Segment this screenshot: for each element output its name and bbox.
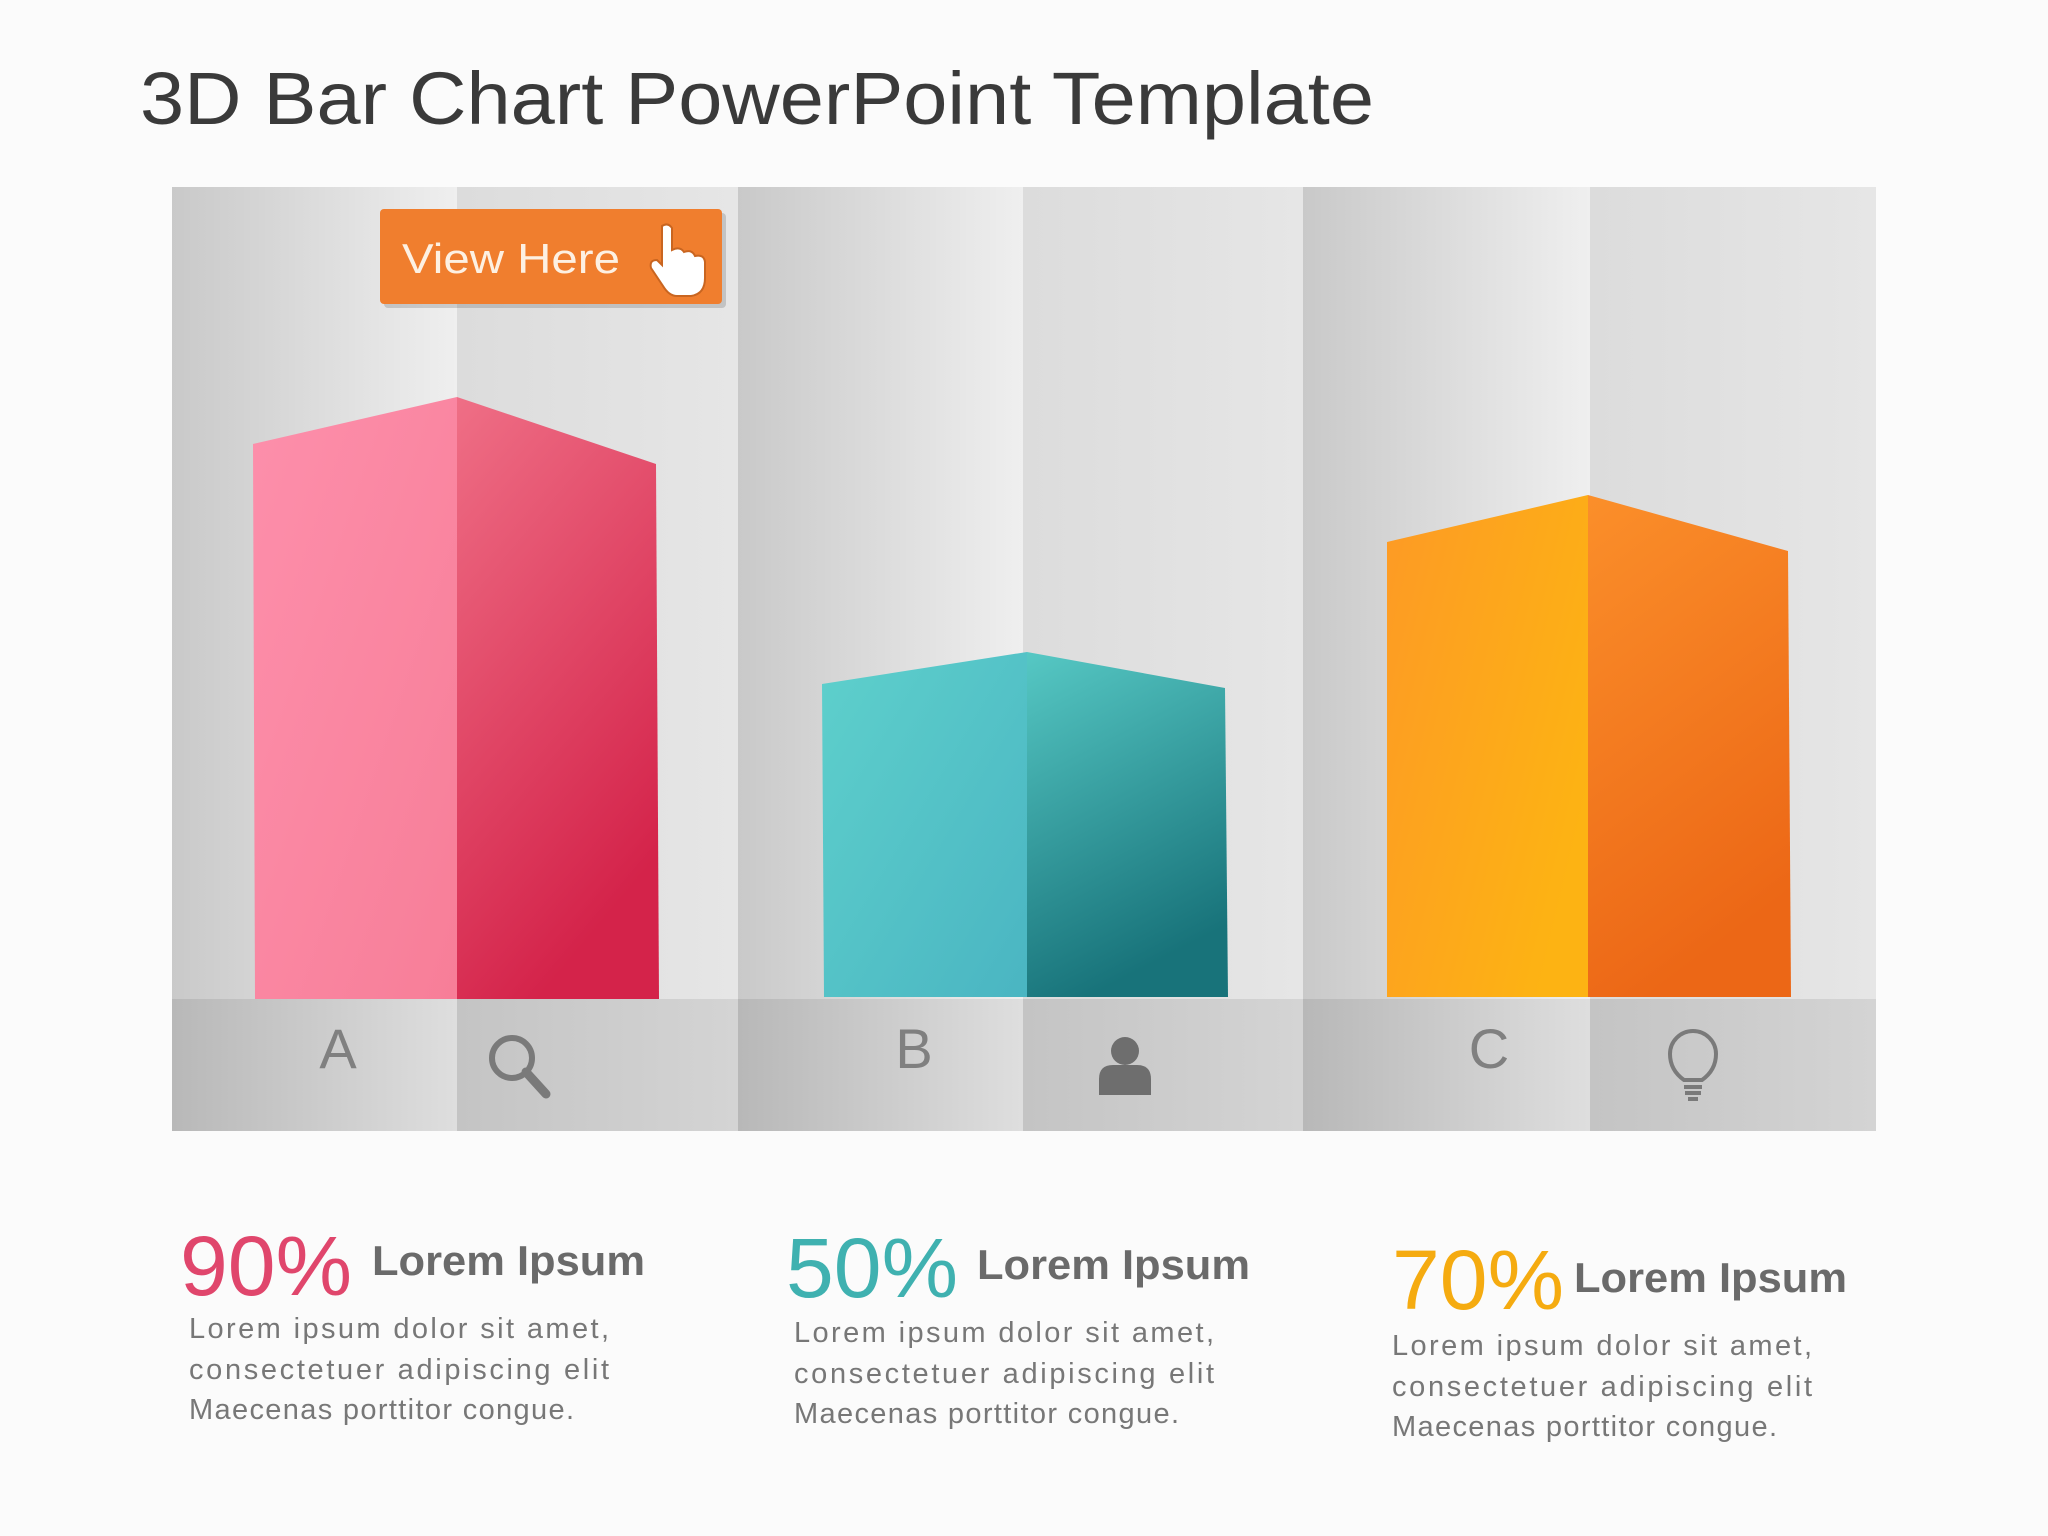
bar C (1387, 495, 1791, 997)
bar A (253, 397, 659, 999)
text block B: 50% (786, 1221, 958, 1315)
text block A: Lorem ipsum dolor sit amet, (189, 1313, 609, 1345)
icon: hand pointer (651, 224, 705, 296)
icon: magnifier (492, 1038, 546, 1094)
text block B: Lorem ipsum dolor sit amet, (794, 1317, 1214, 1349)
text block A: 90% (180, 1219, 352, 1313)
title: 3D Bar Chart PowerPoint Template (140, 57, 1374, 140)
text block C (1392, 1233, 1847, 1443)
icon: light bulb (1670, 1031, 1716, 1099)
bar B (822, 652, 1228, 997)
text block A (180, 1219, 645, 1426)
text block C: Lorem Ipsum (1574, 1254, 1847, 1301)
text block C: consectetuer adipiscing elit (1392, 1371, 1812, 1403)
button: View Here: View Here (402, 235, 620, 282)
text block C: Lorem ipsum dolor sit amet, (1392, 1330, 1812, 1362)
label C: C (1469, 1017, 1509, 1080)
text block C: Maecenas porttitor congue. (1392, 1411, 1777, 1443)
text block C: 70% (1392, 1233, 1564, 1327)
panel: chart background (172, 187, 1876, 1131)
icon: person (1099, 1037, 1151, 1095)
text block B: Maecenas porttitor congue. (794, 1398, 1179, 1430)
label A: A (319, 1017, 357, 1080)
text block B: consectetuer adipiscing elit (794, 1358, 1214, 1390)
label B: B (895, 1017, 933, 1080)
text block B (786, 1221, 1250, 1430)
text block A: Maecenas porttitor congue. (189, 1394, 574, 1426)
text block B: Lorem Ipsum (977, 1241, 1250, 1288)
text block A: consectetuer adipiscing elit (189, 1354, 609, 1386)
text block A: Lorem Ipsum (372, 1237, 645, 1284)
button: View Here (380, 209, 726, 308)
